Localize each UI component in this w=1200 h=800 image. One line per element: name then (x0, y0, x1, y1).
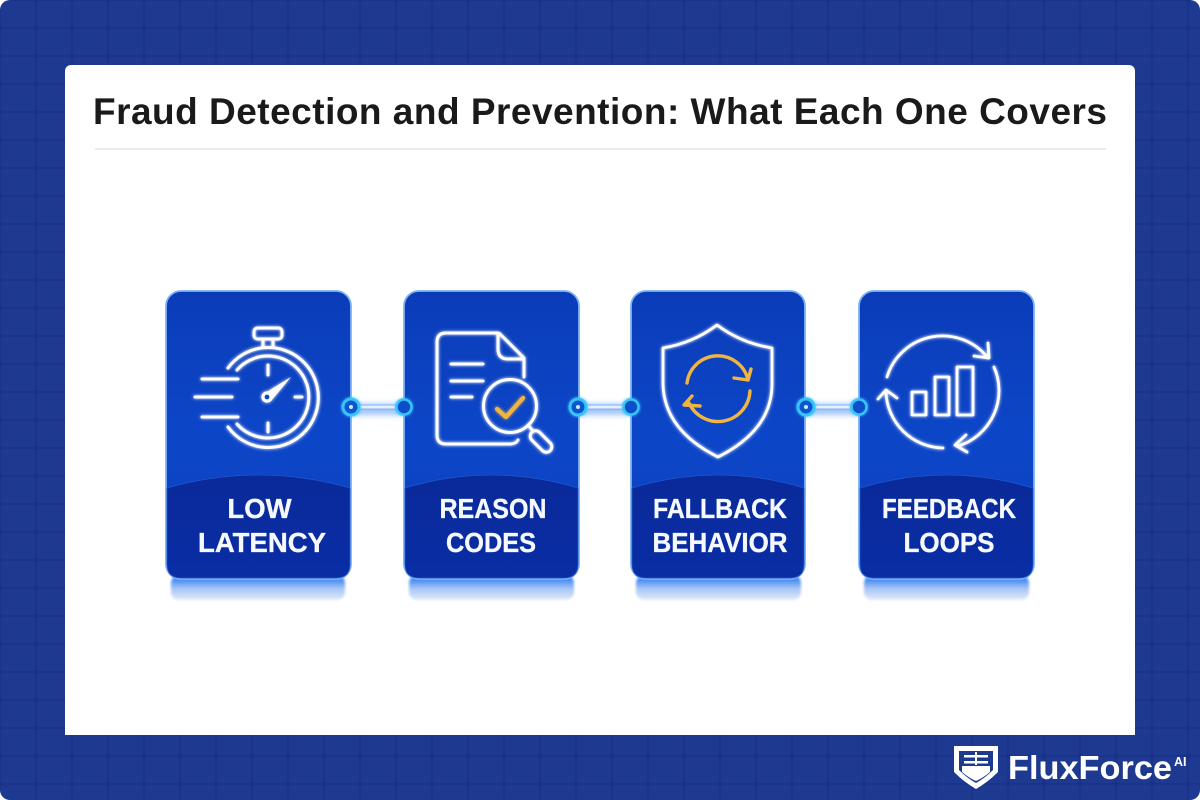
label: REASON (440, 493, 546, 524)
title: Fraud Detection and Prevention: What Each One Covers (93, 91, 1107, 132)
connector 2 (570, 399, 638, 415)
icon: document with magnifier (437, 333, 554, 455)
logo: FluxForce AI (954, 746, 1186, 789)
card band (167, 475, 350, 578)
card band (405, 475, 578, 578)
connector 1 (343, 399, 412, 415)
card band (632, 475, 804, 578)
card: low latency: LATENCY (198, 527, 326, 558)
card 4 shadow (864, 575, 1029, 600)
wordmark: FluxForce (1008, 749, 1172, 786)
icon: logo shield (954, 746, 998, 789)
label: FEEDBACK (882, 493, 1016, 524)
icon: stopwatch (195, 328, 318, 448)
card: reason codes: CODES (446, 527, 536, 558)
logo: FluxForce AI: AI (1174, 755, 1186, 769)
card: fallback behavior: BEHAVIOR (652, 527, 788, 558)
card 1 shadow (171, 575, 345, 600)
card: feedback loops (859, 291, 1034, 579)
icon: feedback loop with bars (878, 336, 999, 452)
label: FALLBACK (653, 493, 787, 524)
title divider (95, 148, 1106, 150)
card 3 shadow (636, 575, 801, 600)
card: low latency (166, 291, 351, 579)
card: fallback behavior (631, 291, 805, 579)
card: feedback loops: LOOPS (904, 527, 994, 558)
card: reason codes (404, 291, 579, 579)
label: LOW (227, 493, 292, 524)
white panel (65, 65, 1135, 735)
card 2 shadow (409, 575, 574, 600)
card band (860, 475, 1033, 578)
icon: sync arrows (684, 356, 751, 422)
connector 3 (798, 399, 866, 415)
icon: shield (663, 325, 772, 457)
